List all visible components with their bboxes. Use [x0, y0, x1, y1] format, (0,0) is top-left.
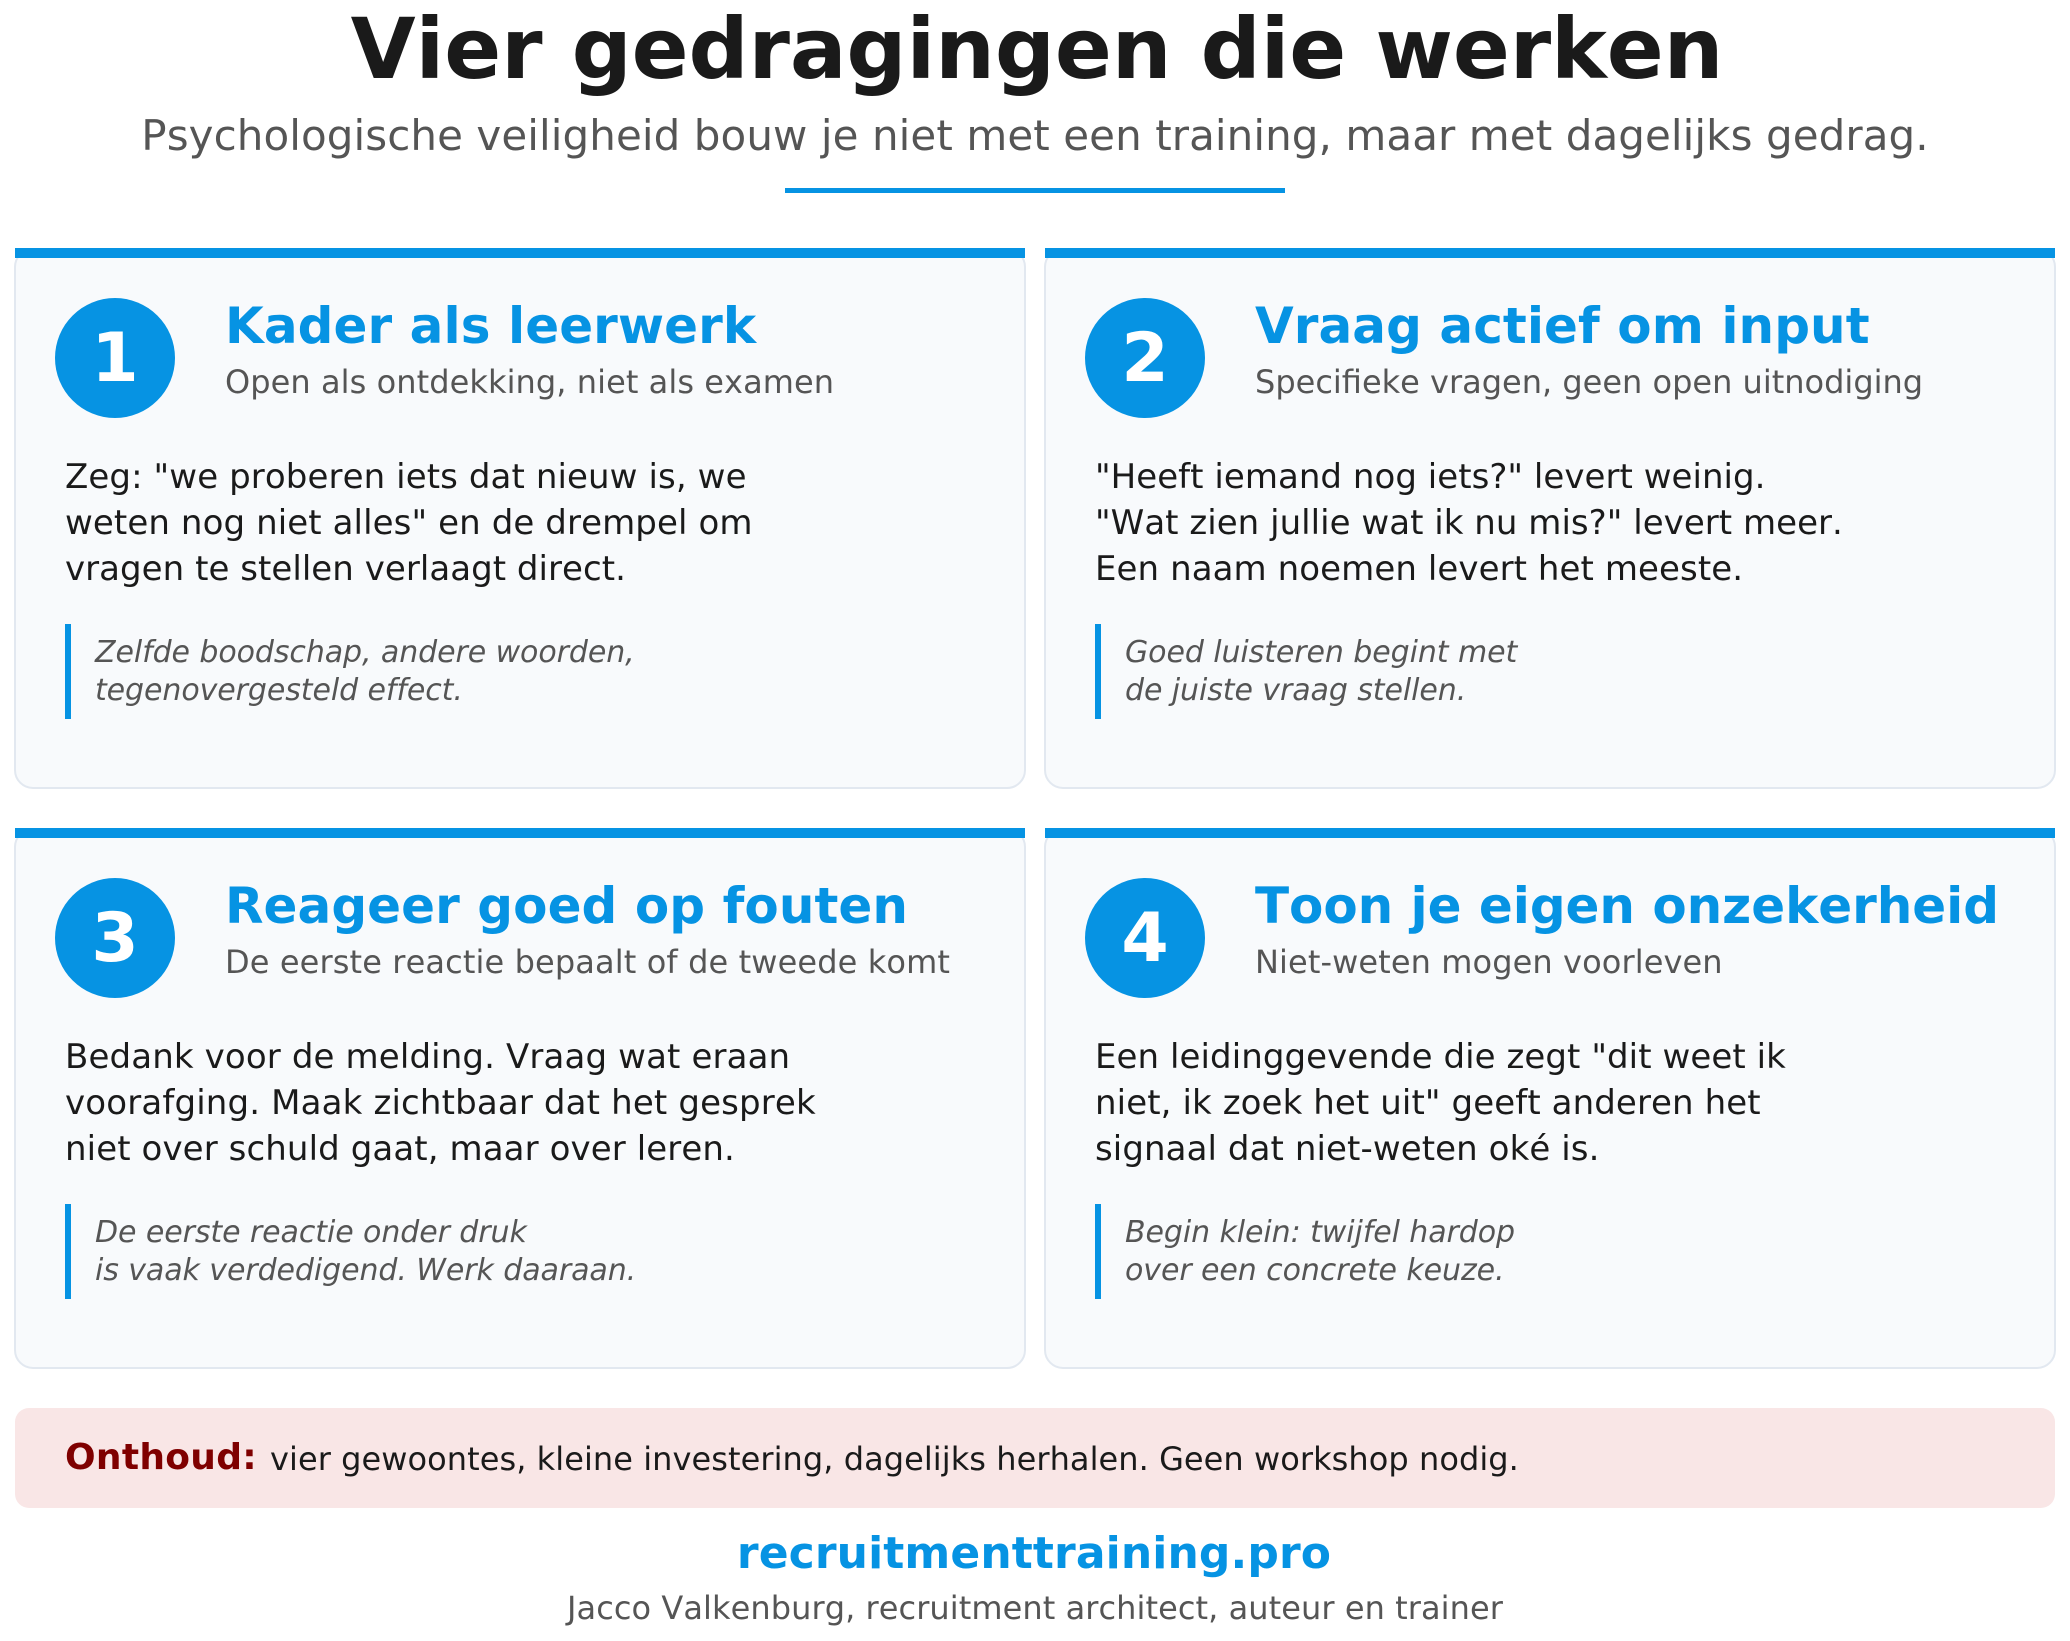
callout text: vier gewoontes, kleine investering, dagelijks herhalen. Geen workshop nodig. — [270, 1440, 1519, 1478]
card 3 body: voorafging. Maak zichtbaar dat het gesprek — [65, 1083, 816, 1123]
callout label: Onthoud: — [65, 1437, 257, 1478]
card 4 body: signaal dat niet-weten oké is. — [1095, 1129, 1600, 1169]
card 1 quote — [65, 624, 965, 719]
card 4 quote: Begin klein: twijfel hardop — [1125, 1215, 1515, 1250]
card 4 quote — [1095, 1204, 1995, 1299]
card 3 quote: is vaak verdedigend. Werk daaraan. — [95, 1253, 636, 1288]
card 3 body: Bedank voor de melding. Vraag wat eraan — [65, 1037, 790, 1077]
card 1 body: vragen te stellen verlaagt direct. — [65, 549, 626, 589]
card 2 subheading: Specifieke vragen, geen open uitnodiging — [1255, 363, 1923, 401]
card 3 heading: Reageer goed op fouten — [225, 877, 908, 935]
number badge 3: 3 — [91, 899, 139, 978]
card 1 heading: Kader als leerwerk — [225, 297, 756, 355]
footer credit: Jacco Valkenburg, recruitment architect, auteur en trainer — [567, 1589, 1503, 1627]
number badge 2 — [1085, 298, 1205, 418]
card 2 body: "Wat zien jullie wat ik nu mis?" levert meer. — [1095, 503, 1843, 543]
callout — [15, 1408, 2055, 1508]
number badge 1: 1 — [91, 319, 139, 398]
header divider — [785, 188, 1285, 193]
card 1 quote: Zelfde boodschap, andere woorden, — [95, 635, 635, 670]
card 1 body — [65, 457, 753, 589]
card 1 body: Zeg: "we proberen iets dat nieuw is, we — [65, 457, 747, 497]
card 2 quote: Goed luisteren begint met — [1125, 635, 1517, 670]
card 3 quote: De eerste reactie onder druk — [95, 1215, 527, 1250]
card 4 body: niet, ik zoek het uit" geeft anderen het — [1095, 1083, 1761, 1123]
card 3 quote — [65, 1204, 965, 1299]
number badge 1 — [55, 298, 175, 418]
card 4 body: Een leidinggevende die zegt "dit weet ik — [1095, 1037, 1786, 1077]
footer site: recruitmenttraining.pro — [737, 1528, 1331, 1579]
panel: card 4 — [1044, 828, 2056, 1369]
number badge 4 — [1085, 878, 1205, 998]
card 4 quote: over een concrete keuze. — [1125, 1253, 1504, 1288]
panel: card 3 — [14, 828, 1026, 1369]
card 4 heading: Toon je eigen onzekerheid — [1255, 877, 1999, 935]
card 3 subheading: De eerste reactie bepaalt of de tweede komt — [225, 943, 950, 981]
card 2 body — [1095, 457, 1843, 589]
subtitle: Psychologische veiligheid bouw je niet met een training, maar met dagelijks gedrag. — [141, 111, 1929, 160]
panel: card 1 — [14, 248, 1026, 789]
card 3 body — [65, 1037, 816, 1169]
card 2 body: "Heeft iemand nog iets?" levert weinig. — [1095, 457, 1766, 497]
title: Vier gedragingen die werken — [351, 0, 1723, 98]
card 4 body — [1095, 1037, 1786, 1169]
card 1 quote: tegenovergesteld effect. — [95, 673, 463, 708]
card 2 body: Een naam noemen levert het meeste. — [1095, 549, 1743, 589]
card 4 subheading: Niet-weten mogen voorleven — [1255, 943, 1723, 981]
card 2 heading: Vraag actief om input — [1255, 297, 1870, 355]
number badge 4: 4 — [1121, 899, 1169, 978]
card 1 subheading: Open als ontdekking, niet als examen — [225, 363, 834, 401]
card 2 quote: de juiste vraag stellen. — [1125, 673, 1466, 708]
number badge 2: 2 — [1121, 319, 1169, 398]
card 1 body: weten nog niet alles" en de drempel om — [65, 503, 753, 543]
number badge 3 — [55, 878, 175, 998]
card 2 quote — [1095, 624, 1995, 719]
panel: card 2 — [1044, 248, 2056, 789]
card 3 body: niet over schuld gaat, maar over leren. — [65, 1129, 735, 1169]
